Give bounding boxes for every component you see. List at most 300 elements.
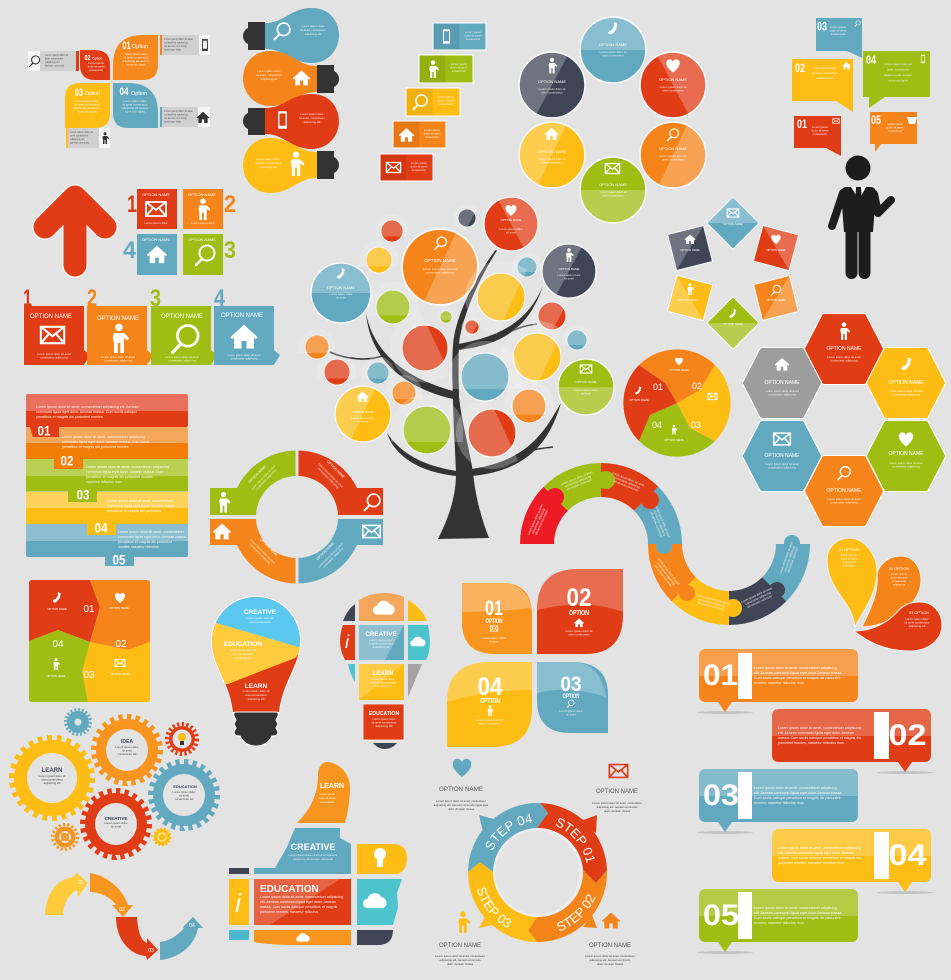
bubble 04: adipiscing elit. Aenean [884, 73, 912, 77]
knob yellow into dark [724, 599, 742, 617]
bulb heading text: amet consectetur [245, 693, 267, 697]
circle: blue phone: OPTION NAME [599, 42, 627, 47]
tile red education: sit amet consectetur [371, 720, 397, 724]
card 3 green [183, 234, 236, 275]
ring quadrant red: Lorem ipsum dolor sit amet [317, 462, 344, 489]
puzzle caption lines: consectetur adipiscing [653, 509, 667, 537]
box: orange home: Lorem ipsum [424, 128, 440, 132]
petal 01: OPTION [486, 619, 502, 625]
circle: red heart: Lorem ipsum dolor sit [660, 85, 686, 89]
bulb: orange [243, 51, 339, 106]
bulb: orange: sit amet, consectetur [256, 73, 282, 77]
chart: puzzle S-curve [520, 463, 810, 625]
thumb creative [254, 828, 351, 874]
pie segment orange [639, 349, 715, 403]
card 1 red [127, 189, 177, 229]
option: person: Lorem ipsum dolor sit amet, consectetur [435, 954, 485, 958]
label 01: Cum sociis natoque penatibus et magnis dis parturient [754, 676, 840, 680]
option: heart [434, 759, 488, 811]
box: red mail [380, 154, 433, 181]
petal 02: OPTION [569, 610, 589, 617]
option: mail: dolor. Aenean massa [604, 809, 631, 813]
petal 01: sit amet [489, 640, 499, 644]
chart: pinwheel pie [623, 349, 731, 457]
circle: orange search: amet consectetur [662, 158, 684, 162]
step labels [477, 814, 596, 931]
puzzle square yellow: OPTION NAME [110, 672, 130, 676]
tile teal corner [348, 664, 355, 682]
hexagon: red person: consectetur adipiscing [830, 358, 858, 362]
petal 04: 04 [120, 86, 129, 98]
stripe 05 blue [26, 524, 188, 568]
card 1 [23, 285, 90, 365]
box: blue phone: consectetur [466, 37, 480, 41]
option: person [435, 911, 485, 966]
icon: red up arrow [45, 197, 105, 265]
bubble 02: 02 [795, 61, 805, 75]
thumb left column: i [235, 888, 242, 918]
petal 02: 02 [566, 584, 592, 612]
label 03: Cum sociis natoque penatibus et magnis dis parturient [754, 796, 840, 800]
card 3: 3 [150, 285, 161, 312]
bulb: yellow: Lorem ipsum dolor [256, 157, 280, 161]
label 01 [697, 649, 858, 714]
card 1 red: Lorem ipsum dolor [144, 221, 168, 225]
thumb creative: adipiscing elit aenean commodo [293, 857, 333, 861]
option strips: amet consectetur [70, 134, 89, 138]
gear learn yellow: amet consectetur [41, 778, 63, 782]
stripe 05 blue: penatibus et magnis dis parturient [118, 540, 172, 544]
petal 02: dolor sit amet [88, 64, 105, 68]
card 4: consectetur adipiscing [230, 356, 258, 360]
card 2 orange [183, 189, 236, 229]
label 02: massa. Cum sociis natoque penatibus et magnis dis [778, 736, 861, 740]
bulb: orange: Lorem ipsum dolor [257, 69, 281, 73]
petal 01 [113, 35, 158, 80]
puzzle caption lines: consectetur adipiscing [783, 545, 796, 573]
strip icons [30, 39, 209, 144]
segment 7 dark [729, 577, 786, 625]
square: dark home [668, 226, 712, 270]
petal 04: Lorem ipsum dolor [123, 99, 147, 103]
petal 04: OPTION [480, 698, 500, 705]
square: yellow person [667, 275, 713, 321]
circle: dark person: Lorem ipsum dolor sit [539, 87, 565, 91]
box: orange home: dolor sit amet [424, 132, 441, 136]
label 01: 01 [703, 659, 738, 692]
hexagon: green heart [869, 423, 943, 489]
pie segment red: 01 [653, 382, 663, 392]
label 02: elit. Aenean commodo ligula eget dolor. Aenean [778, 731, 854, 735]
card 2: consectetur adipiscing [104, 358, 132, 362]
label 05: Lorem ipsum dolor sit amet, consectetuer adipiscing [754, 906, 837, 910]
stripe 05 blue: montes nascetur ridiculus [118, 545, 159, 549]
bubble 04 [863, 51, 930, 108]
puzzle caption lines: elit aenean commodo [697, 600, 724, 611]
puzzle square orange [90, 580, 150, 650]
circle: red heart: amet consectetur [662, 88, 684, 92]
ring quadrant orange: consectetur adipiscing [249, 543, 272, 565]
step labels: STEP 02 [557, 894, 596, 931]
option strips: consectetur adipiscing [164, 42, 188, 44]
bubble 01 [794, 116, 841, 156]
segment 4 blue [634, 487, 682, 544]
ring quadrant blue: OPTION NAME [315, 541, 336, 561]
card 4 blue: OPTION NAME [142, 237, 170, 242]
teardrop 01 yellow [827, 538, 877, 627]
option: home: OPTION NAME [589, 943, 631, 949]
gear bulb small red [167, 724, 197, 754]
chart: puzzle square 01-04 [29, 580, 150, 702]
hexagon: yellow phone: OPTION NAME [888, 380, 924, 386]
puzzle caption lines: Lorem ipsum dolor sit amet [526, 503, 544, 536]
teardrop 02 orange: adipiscing [893, 582, 906, 586]
bulb: red: adipiscing elit [304, 120, 321, 124]
gear education blue: EDUCATION [173, 784, 197, 789]
label 04: elit. Aenean commodo ligula eget dolor. Aenean [778, 851, 854, 855]
label 02: parturient montes, nascetur ridiculus mus. [778, 741, 845, 745]
bulb heading text: amet consectetur [249, 620, 271, 624]
puzzle square red: OPTION NAME [47, 607, 67, 611]
tree circle: orange search: Lorem ipsum dolor sit amet [423, 267, 457, 271]
teardrop 03 red: Lorem ipsum dolor [905, 617, 929, 621]
tree circle: dark person [532, 234, 596, 298]
bulb heading text [224, 609, 277, 701]
bubble 04: Lorem ipsum dolor sit [885, 62, 911, 66]
card 3: consectetur adipiscing [168, 358, 196, 362]
option strips: aenean commodo [45, 64, 65, 68]
bubble 05: dolor sit amet [887, 126, 904, 130]
option: mail [592, 765, 642, 813]
teardrop 02 orange: 02 OPTION [889, 567, 909, 571]
puzzle caption lines: Lorem ipsum dolor sit amet [778, 541, 794, 574]
label 05: montes, nascetur ridiculus mus. [754, 921, 805, 925]
puzzle square yellow [82, 642, 150, 702]
arrow 03 red: 03 [148, 948, 154, 954]
corner triangle red [578, 815, 597, 833]
petal 02: Option [92, 56, 102, 60]
gear learn yellow: LEARN [42, 768, 62, 774]
circle: green mail [580, 157, 646, 223]
arrow 02 orange [90, 873, 133, 917]
arrow 03 red [116, 917, 158, 960]
option strips: ligula eget dolor [164, 48, 181, 52]
ring arc blue step 04 [468, 803, 548, 872]
bulb glass outline [212, 597, 300, 712]
square: red heart [753, 225, 799, 271]
bubble 02: sit amet, consectetur [812, 71, 838, 75]
label 05: 05 [703, 899, 739, 932]
chart: tree with circles [305, 187, 614, 539]
petal 01: Lorem ipsum dolor [124, 52, 148, 56]
tile orange cloud [359, 593, 404, 621]
bulb heading text: amet consectetur [232, 652, 254, 656]
hexagon: gray home: Lorem ipsum dolor sit amet [765, 389, 799, 393]
tree circle: blue phone: Lorem ipsum dolor [329, 292, 353, 296]
card 4 blue [123, 234, 177, 275]
pie segment orange: 02 [692, 381, 702, 391]
circle: orange search: Lorem ipsum dolor sit [660, 154, 686, 158]
teardrop 02 orange: Lorem ipsum [891, 572, 907, 576]
petal 01: 01 [485, 597, 503, 620]
hexagon: blue mail [745, 423, 819, 489]
bulb heading text: Lorem ipsum dolor sit [230, 648, 256, 652]
teardrop 01 yellow: consectetur [842, 560, 856, 564]
tile dark corner [343, 604, 355, 621]
card 4 [214, 285, 280, 365]
petal 04: Lorem ipsum dolor sit [477, 718, 503, 722]
tile yellow learn: Lorem ipsum dolor [371, 677, 395, 681]
card 2 orange: OPTION NAME [188, 192, 216, 197]
puzzle caption lines: elit aenean commodo [566, 478, 593, 491]
panel: numbered label bubbles [697, 649, 933, 954]
puzzle square green [29, 630, 90, 702]
petal 03: commodo ligula [77, 110, 97, 114]
bulb heading text: Lorem ipsum dolor sit [243, 689, 269, 693]
option: heart: Lorem ipsum dolor sit amet, consectetur [436, 799, 486, 803]
thumb right tile cloud [357, 879, 402, 925]
panel: four light bulbs [243, 8, 339, 193]
square: dark home: OPTION NAME [680, 248, 700, 252]
pie segment yellow: 03 [691, 420, 701, 430]
hexagon: green heart: consectetur adipiscing [892, 464, 920, 468]
box: yellow search: Lorem ipsum [438, 95, 454, 99]
hexagon: gray home [745, 350, 819, 416]
label 03: montes, nascetur ridiculus mus. [754, 801, 805, 805]
card 2: OPTION NAME [97, 316, 139, 322]
bulb cap [373, 743, 397, 749]
label 04: 04 [888, 839, 927, 872]
circle: dark person [507, 40, 585, 118]
bulb: yellow [243, 138, 339, 193]
stripe 01 red: commodo ligula eget dolor. Aenean massa. Cum sociis natoque [36, 410, 137, 414]
box: green person: dolor sit amet [451, 66, 468, 70]
option: home: dolor. Aenean massa [597, 962, 624, 966]
card 2: Lorem ipsum dolor sit amet [101, 355, 135, 359]
option: home: Lorem ipsum dolor sit amet, consectetur [585, 954, 635, 958]
circle: yellow home [508, 111, 585, 188]
bulb bands [212, 597, 300, 712]
option strips: elit aenean commodo [164, 117, 188, 120]
hexagon: orange search: consectetur adipiscing [830, 500, 858, 504]
ring quadrant orange [210, 519, 296, 584]
square: orange search: OPTION NAME [766, 298, 786, 302]
puzzle caption lines: elit aenean commodo [613, 479, 639, 493]
petal 02: amet consectetur [568, 632, 590, 636]
tree small decorative circles [305, 206, 587, 465]
chart: curved arrows [45, 873, 203, 960]
card 3 [150, 285, 217, 365]
bubble 03 [816, 18, 862, 58]
chart: step ring [434, 758, 642, 966]
circle: blue phone: Lorem ipsum dolor sit [600, 50, 626, 54]
bubble 03: dolor sit amet [830, 28, 847, 32]
option: mail: OPTION NAME [596, 789, 638, 795]
hexagon: orange search: OPTION NAME [826, 488, 862, 494]
option strips: amet consectetur [45, 58, 64, 60]
petal 01: commodo ligula [126, 62, 146, 66]
petal 04 [447, 662, 532, 747]
option: person: OPTION NAME [439, 943, 481, 949]
tile yellow corner [408, 600, 427, 621]
gear learn yellow: adipiscing elit [44, 781, 61, 785]
petal 04: sit amet consectetur [122, 102, 148, 106]
petal 01: Lorem ipsum dolor [482, 636, 506, 640]
tile blue creative: sit amet consectetur [368, 642, 394, 646]
box: red mail: dolor sit amet [411, 164, 428, 168]
knob red into blue [641, 491, 659, 509]
gear idea orange: Lorem ipsum dolor [115, 745, 139, 749]
knob blue into orange [656, 538, 672, 554]
label 03 [697, 769, 858, 834]
bulb: red: sit amet, consectetur [299, 116, 325, 120]
tile blue creative: CREATIVE [365, 631, 397, 638]
tree circle: orange search: consectetur adipiscing [426, 270, 454, 274]
thumb learn: consectetur [320, 800, 334, 804]
option: mail: adipiscing elit. Aenean commodo [597, 805, 638, 809]
petal 01: adipiscing elit aenean [123, 59, 150, 63]
circle: yellow home: Lorem ipsum dolor sit [539, 157, 565, 161]
teardrop 01 yellow: adipiscing [843, 564, 856, 568]
tree circle: green mail [558, 359, 614, 415]
petal 01 [462, 583, 532, 654]
option: mail: Lorem ipsum dolor sit amet, consectetur [592, 801, 642, 805]
stripe 03 green: Lorem ipsum dolor sit amet, consectetuer adipiscing [86, 465, 169, 469]
step labels: STEP 04 [486, 814, 532, 850]
segment 5 orange [648, 544, 696, 601]
bulb: blue: sit amet, consectetur [300, 28, 326, 32]
tile gray corner [408, 664, 422, 697]
tree circle: yellow home [326, 377, 391, 442]
puzzle caption lines: elit aenean commodo [786, 546, 799, 573]
tile red info [340, 625, 355, 660]
stripe 04 yellow: Lorem ipsum dolor sit amet, consectetuer [107, 499, 174, 503]
square: yellow person: OPTION NAME [678, 298, 698, 302]
petal 03: sit amet [566, 712, 576, 716]
tile blue creative [359, 625, 404, 660]
circle: yellow home: amet consectetur [541, 160, 563, 164]
label 05 [697, 889, 858, 954]
ring quadrant orange: OPTION NAME [259, 537, 279, 558]
gear education blue: Lorem ipsum dolor [172, 790, 196, 794]
stripe 01 red: Lorem ipsum dolor sit amet, consectetuer adipiscing elit. Aenean [36, 405, 139, 409]
ring quadrant red: consectetur adipiscing [317, 467, 340, 489]
teardrop 02 orange [862, 556, 921, 627]
tree circle: blue phone: OPTION NAME [327, 285, 355, 290]
bulb heading text: adipiscing elit [248, 697, 265, 701]
puzzle square red: 01 [83, 604, 95, 615]
label 01: elit. Aenean commodo ligula eget dolor. Aenean massa. [754, 671, 843, 675]
step labels: STEP 03 [477, 887, 512, 928]
ring inner light band [493, 828, 582, 917]
thumb learn [297, 762, 350, 823]
hexagon: green heart: OPTION NAME [888, 451, 924, 457]
gear idea orange [94, 717, 160, 783]
card 1 red: 1 [127, 191, 137, 218]
pie segment green [639, 403, 715, 457]
panel: four petals with option strips [28, 35, 210, 148]
square: green phone: OPTION NAME [723, 322, 743, 326]
bulb: orange: adipiscing elit [261, 77, 278, 81]
gear creative red: CREATIVE [105, 816, 127, 821]
tree circle: green mail: Lorem ipsum dolor [574, 388, 598, 392]
label 03: 03 [703, 779, 739, 812]
card 4: Lorem ipsum dolor sit amet [227, 353, 261, 357]
puzzle square green: OPTION NAME [46, 674, 66, 678]
gear idea orange: IDEA [121, 739, 133, 745]
option strips: aenean commodo [70, 142, 90, 144]
tree circle: yellow home: Lorem ipsum dolor [351, 416, 375, 420]
hexagon: red person: OPTION NAME [826, 346, 862, 352]
box: orange home: consectetur [425, 135, 439, 139]
stripe 03 green [26, 459, 188, 502]
thumb education: elit. Aenean commodo ligula eget dolor. Aenean [260, 900, 336, 904]
puzzle caption lines: consectetur adipiscing [697, 597, 726, 608]
bubble 01: dolor sit amet [812, 128, 829, 132]
ring quadrant green: consectetur adipiscing [255, 468, 277, 491]
puzzle caption lines: consectetur adipiscing [745, 590, 772, 606]
square: green phone [707, 297, 759, 349]
icon: businessman [832, 156, 891, 273]
puzzle caption lines: elit aenean commodo [650, 511, 663, 538]
hexagon: orange search [807, 458, 881, 524]
bubble 03: consectetur [831, 32, 845, 36]
bubble 05 [870, 112, 917, 152]
stripe 02 orange: 02 [60, 452, 74, 468]
petal 02 [537, 569, 623, 654]
thumb education: EDUCATION [260, 884, 319, 895]
petal 03: sit amet consectetur [74, 102, 100, 106]
teardrop 03 red: 03 OPTION [909, 611, 929, 615]
card 1: Lorem ipsum dolor sit amet [37, 352, 71, 356]
stripe 01 red: 01 [38, 422, 51, 438]
tile teal brain [408, 625, 430, 660]
tree circle: blue phone [311, 263, 371, 323]
tile red education: EDUCATION [369, 711, 399, 717]
ring arc orange step 02 [528, 870, 607, 942]
gear education blue: sit amet [179, 794, 189, 798]
option: heart: OPTION NAME [439, 786, 483, 793]
tree circle: red heart: Lorem ipsum dolor [499, 227, 523, 231]
panel: rotated squares ring [667, 197, 799, 349]
thumb education: massa. Cum sociis natoque penatibus et magnis [260, 905, 338, 909]
stripe 04 yellow: penatibus et magnis dis parturient [107, 509, 161, 513]
label 02 [772, 709, 933, 774]
petal 03: Lorem ipsum dolor [559, 709, 583, 713]
puzzle caption lines: consectetur adipiscing [564, 474, 592, 488]
circle: red heart [640, 40, 718, 118]
option strips [28, 35, 210, 148]
label 04: Lorem ipsum dolor sit amet, consectetuer adipiscing [778, 846, 861, 850]
puzzle caption lines: elit aenean commodo [653, 564, 673, 588]
petal 04: commodo ligula [125, 110, 145, 114]
stripe 04 yellow [26, 492, 188, 536]
gear creative red: sit amet [111, 824, 121, 828]
tree circle: red heart [484, 187, 548, 251]
tree circle: orange search: OPTION NAME [424, 258, 456, 263]
label 04: massa. Cum sociis natoque penatibus et magnis dis [778, 856, 861, 860]
chart: four square icon cards with arrow [45, 189, 236, 275]
puzzle caption lines: elit aenean commodo [747, 594, 773, 609]
segment 6 yellow [672, 577, 729, 625]
ring quadrant red [298, 450, 383, 515]
arrow 01 yellow: 01 [78, 880, 84, 886]
bulb base [234, 712, 278, 746]
teardrop 02 orange: consectetur [892, 579, 906, 583]
puzzle caption lines: consectetur adipiscing [656, 561, 676, 586]
stripe 02 orange: penatibus et magnis dis parturient montes [62, 445, 129, 449]
gear education blue [151, 762, 217, 828]
